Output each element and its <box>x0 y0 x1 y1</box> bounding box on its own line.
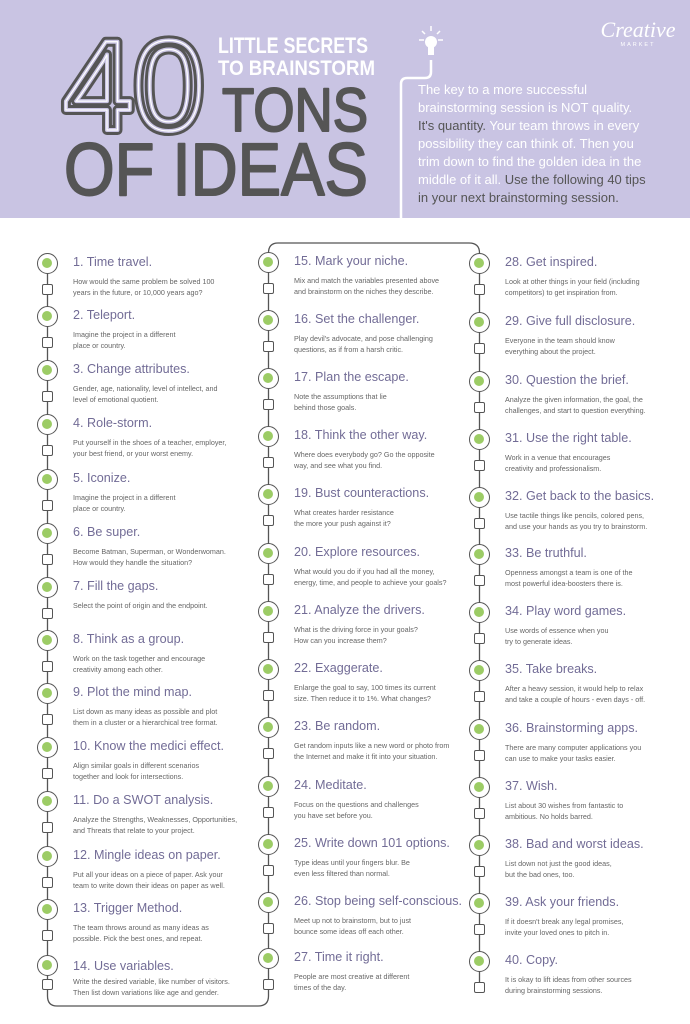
column 2: Mix and match the variables presented above <box>294 276 439 285</box>
text: but the bad ones, too. <box>505 870 575 879</box>
text: How can you increase them? <box>294 636 387 645</box>
text: the more your push against it? <box>294 519 391 528</box>
text: Openness amongst a team is one of the <box>505 568 632 577</box>
text: 26. Stop being self-conscious. <box>294 894 462 908</box>
header band <box>0 0 690 218</box>
text: 23. Be random. <box>294 719 380 733</box>
text: Put yourself in the shoes of a teacher, employer, <box>73 438 226 447</box>
text: 29. Give full disclosure. <box>505 314 635 328</box>
text: possible. Pick the best ones, and repeat. <box>73 934 202 943</box>
logo: Creative Market: Creative <box>601 17 675 42</box>
text: Write the desired variable, like number of visitors. <box>73 977 230 986</box>
text: can use to make your tasks easier. <box>505 754 616 763</box>
text: and Threats that relate to your project. <box>73 826 195 835</box>
text: What is the driving force in your goals? <box>294 625 418 634</box>
text: 25. Write down 101 options. <box>294 836 450 850</box>
column 1 <box>37 253 214 297</box>
text: 35. Take breaks. <box>505 662 597 676</box>
text: size. Then reduce it to 1%. What changes? <box>294 694 431 703</box>
text: bounce some ideas off each other. <box>294 927 404 936</box>
text: Type ideas until your fingers blur. Be <box>294 858 410 867</box>
text: Focus on the questions and challenges <box>294 800 419 809</box>
text: the Internet and make it fit into your situation. <box>294 752 437 761</box>
text: 5. Iconize. <box>73 471 130 485</box>
text: 2. Teleport. <box>73 308 135 322</box>
title graphic: 40 <box>63 15 204 158</box>
text: 31. Use the right table. <box>505 431 632 445</box>
text: What would you do if you had all the money, <box>294 567 435 576</box>
column 2 <box>258 252 439 296</box>
text: and use your hands as you try to brainstorm. <box>505 522 647 531</box>
text: 18. Think the other way. <box>294 428 427 442</box>
text: behind those goals. <box>294 403 356 412</box>
text: them in a cluster or a hierarchical tree format. <box>73 718 218 727</box>
text: 38. Bad and worst ideas. <box>505 837 644 851</box>
text: 6. Be super. <box>73 525 140 539</box>
text: 10. Know the medici effect. <box>73 739 224 753</box>
text: Use words of essence when you <box>505 626 608 635</box>
text: 39. Ask your friends. <box>505 895 619 909</box>
text: There are many computer applications you <box>505 743 641 752</box>
text: invite your loved ones to pitch in. <box>505 928 609 937</box>
text: Imagine the project in a different <box>73 493 176 502</box>
text: Put all your ideas on a piece of paper. Ask your <box>73 870 223 879</box>
text: Then list down variations like age and gender. <box>73 988 219 997</box>
text: level of emotional quotient. <box>73 395 159 404</box>
text: 17. Plan the escape. <box>294 370 409 384</box>
text: you have set before you. <box>294 811 373 820</box>
text: Meet up not to brainstorm, but to just <box>294 916 411 925</box>
text: Gender, age, nationality, level of intellect, and <box>73 384 218 393</box>
text: way, and see what you find. <box>294 461 382 470</box>
text: Analyze the Strengths, Weaknesses, Opportunities, <box>73 815 237 824</box>
text: Get random inputs like a new word or photo from <box>294 741 449 750</box>
text: How would they handle the situation? <box>73 558 192 567</box>
text: energy, time, and people to achieve your goals? <box>294 578 446 587</box>
text: Become Batman, Superman, or Wonderwoman. <box>73 547 226 556</box>
text: People are most creative at different <box>294 972 409 981</box>
text: Where does everybody go? Go the opposite <box>294 450 435 459</box>
icon: lightbulb with cord <box>400 26 443 218</box>
text: 24. Meditate. <box>294 778 367 792</box>
text: 8. Think as a group. <box>73 632 184 646</box>
text: times of the day. <box>294 983 346 992</box>
column 3: competitors) to get inspiration from. <box>505 288 618 297</box>
text: creativity among each other. <box>73 665 163 674</box>
text: 30. Question the brief. <box>505 373 629 387</box>
title graphic: 40 <box>63 15 204 158</box>
text: 34. Play word games. <box>505 604 626 618</box>
text: creativity and professionalism. <box>505 464 601 473</box>
title graphic <box>60 15 375 211</box>
logo: Creative Market: MARKET <box>621 42 655 48</box>
text: ambitious. No holds barred. <box>505 812 593 821</box>
text: 3. Change attributes. <box>73 362 190 376</box>
intro paragraph: The key to a more successful brainstorming session is NOT quality. It's quantity. Your team throws in every possibility they can think of. Then you trim down to find the golden idea in the middle of it all. Use the following 40 tips in your next brainstorming session. <box>418 82 646 205</box>
text: Note the assumptions that lie <box>294 392 387 401</box>
text: 27. Time it right. <box>294 950 384 964</box>
text: 9. Plot the mind map. <box>73 685 192 699</box>
text: Align similar goals in different scenarios <box>73 761 199 770</box>
text: List down as many ideas as possible and plot <box>73 707 217 716</box>
column 2: and brainstorm on the niches they describe. <box>294 287 433 296</box>
text: during brainstorming sessions. <box>505 986 602 995</box>
text: everything about the project. <box>505 347 596 356</box>
text: What creates harder resistance <box>294 508 394 517</box>
text: List about 30 wishes from fantastic to <box>505 801 623 810</box>
text: 4. Role-storm. <box>73 416 152 430</box>
text: Imagine the project in a different <box>73 330 176 339</box>
text: 13. Trigger Method. <box>73 901 182 915</box>
text: and take a couple of hours - even days - off. <box>505 695 645 704</box>
text: 22. Exaggerate. <box>294 661 383 675</box>
column 1: 1. Time travel. <box>73 255 152 269</box>
title graphic: TO BRAINSTORM <box>218 57 375 80</box>
title graphic: 40 <box>63 15 204 158</box>
column 3: Look at other things in your field (including <box>505 277 640 286</box>
text: 14. Use variables. <box>73 959 174 973</box>
text: together and look for intersections. <box>73 772 183 781</box>
title graphic: OF IDEAS <box>64 128 368 211</box>
column 3 <box>469 253 640 297</box>
text: place or country. <box>73 341 126 350</box>
text: Everyone in the team should know <box>505 336 615 345</box>
text: even less filtered than normal. <box>294 869 390 878</box>
text: 12. Mingle ideas on paper. <box>73 848 221 862</box>
text: Analyze the given information, the goal, the <box>505 395 643 404</box>
text: Enlarge the goal to say, 100 times its current <box>294 683 436 692</box>
text: 7. Fill the gaps. <box>73 579 158 593</box>
text: Use tactile things like pencils, colored pens, <box>505 511 644 520</box>
text: 19. Bust counteractions. <box>294 486 429 500</box>
text: challenges, and start to question everything. <box>505 406 646 415</box>
text: 16. Set the challenger. <box>294 312 419 326</box>
column 1: How would the same problem be solved 100 <box>73 277 214 286</box>
text: questions, as if from a harsh critic. <box>294 345 403 354</box>
text: place or country. <box>73 504 126 513</box>
text: Work in a venue that encourages <box>505 453 610 462</box>
text: List down not just the good ideas, <box>505 859 612 868</box>
text: 20. Explore resources. <box>294 545 420 559</box>
text: try to generate ideas. <box>505 637 573 646</box>
text: 33. Be truthful. <box>505 546 587 560</box>
column 3: 28. Get inspired. <box>505 255 597 269</box>
text: 32. Get back to the basics. <box>505 489 654 503</box>
text: your best friend, or your worst enemy. <box>73 449 193 458</box>
column 2: 15. Mark your niche. <box>294 254 408 268</box>
text: 21. Analyze the drivers. <box>294 603 425 617</box>
text: It is okay to lift ideas from other sources <box>505 975 632 984</box>
text: 11. Do a SWOT analysis. <box>73 793 213 807</box>
title graphic: LITTLE SECRETS <box>218 33 368 58</box>
text: most powerful idea-boosters there is. <box>505 579 623 588</box>
column 1: years in the future, or 10,000 years ago? <box>73 288 202 297</box>
text: Select the point of origin and the endpoint. <box>73 601 208 610</box>
text: Play devil's advocate, and pose challenging <box>294 334 433 343</box>
text: After a heavy session, it would help to relax <box>505 684 643 693</box>
text: 36. Brainstorming apps. <box>505 721 638 735</box>
text: 37. Wish. <box>505 779 558 793</box>
text: If it doesn't break any legal promises, <box>505 917 623 926</box>
title graphic: TONS <box>222 76 368 144</box>
text: Work on the task together and encourage <box>73 654 205 663</box>
text: team to write down their ideas on paper as well. <box>73 881 225 890</box>
text: The team throws around as many ideas as <box>73 923 209 932</box>
text: 40. Copy. <box>505 953 558 967</box>
